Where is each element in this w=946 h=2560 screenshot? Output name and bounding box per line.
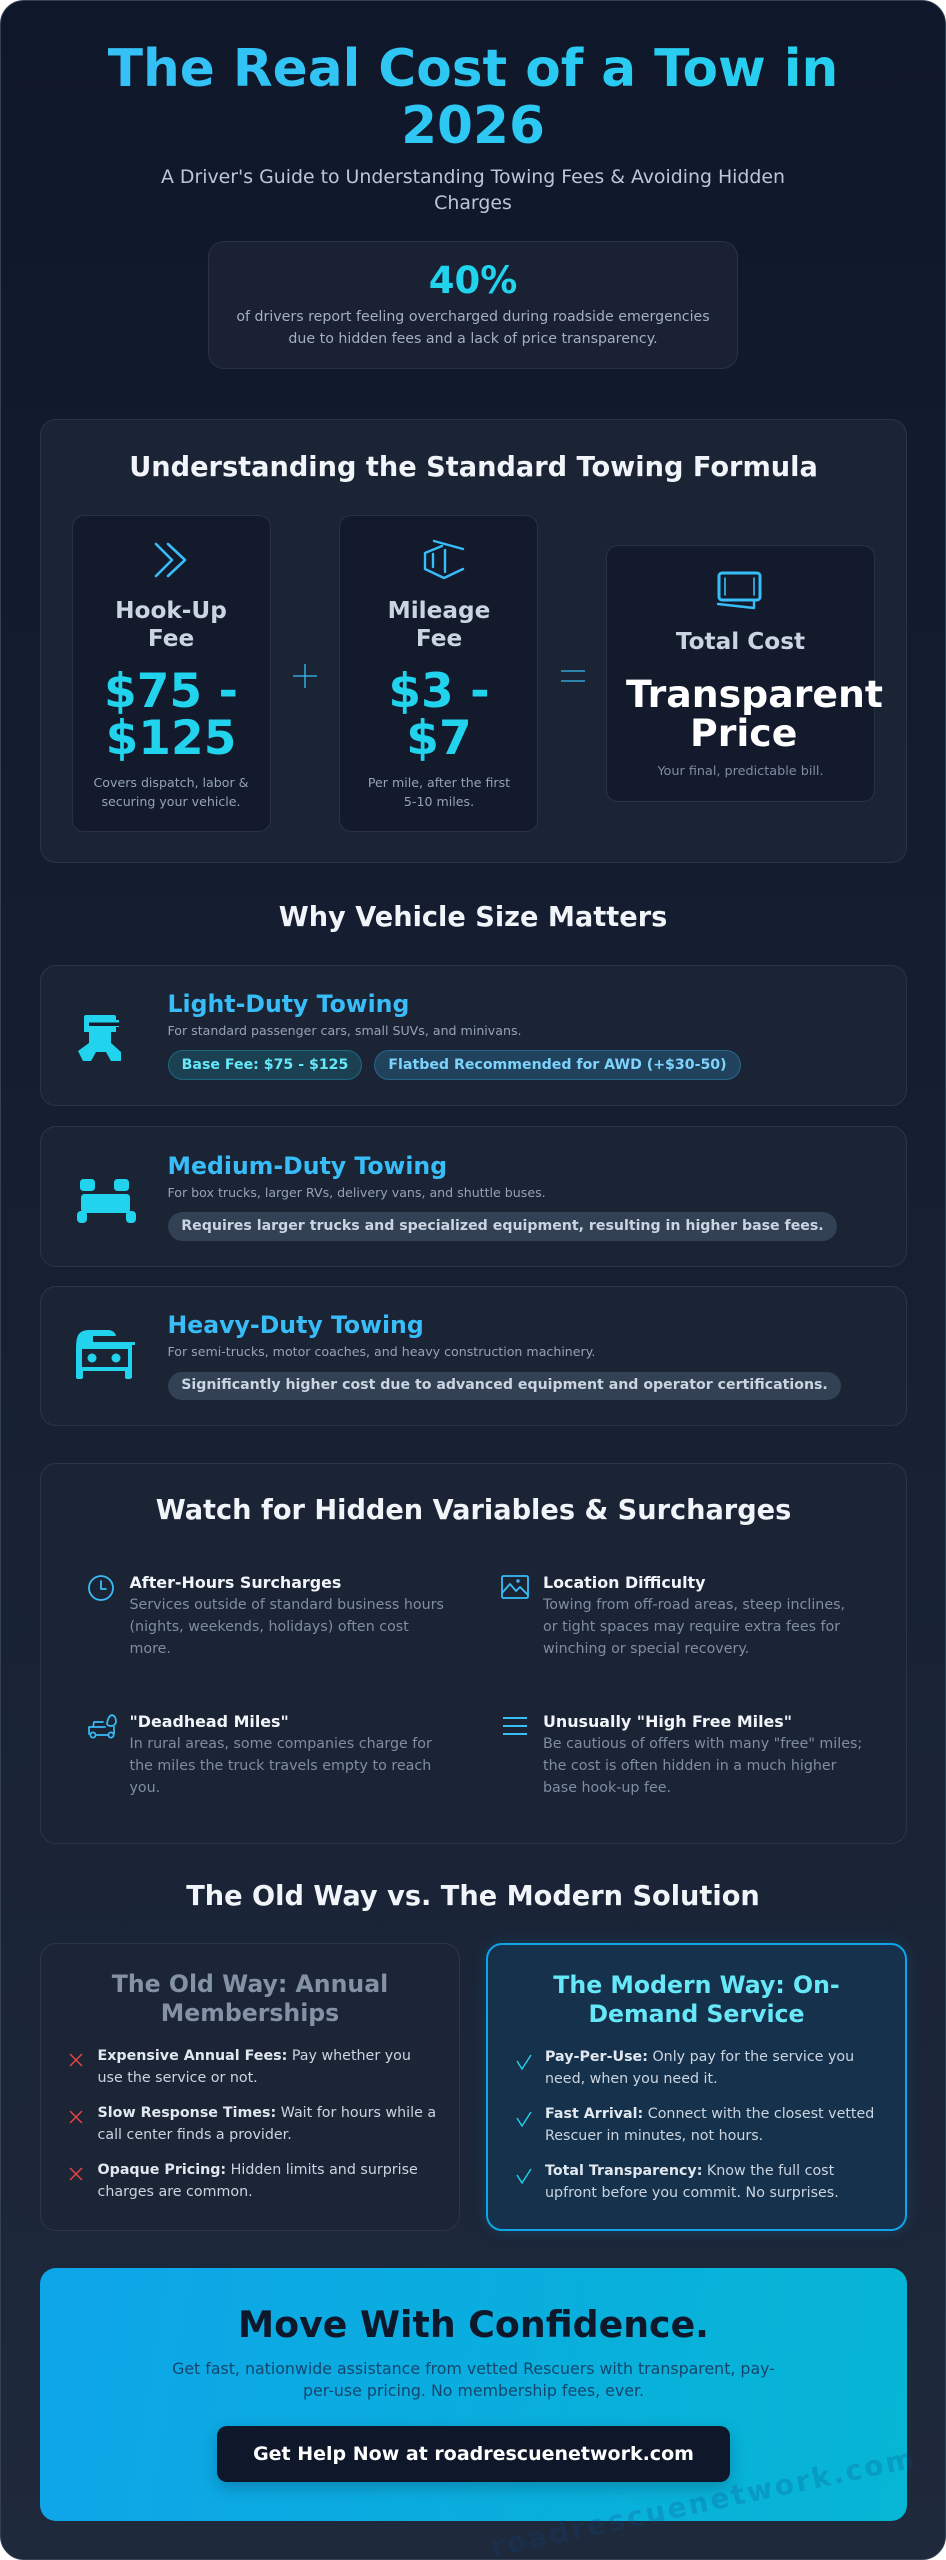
icon: medium truck xyxy=(77,1179,136,1223)
item: deadhead miles xyxy=(88,1712,432,1796)
value: transparent price xyxy=(626,672,883,754)
title: The Real Cost of a Tow in xyxy=(108,38,838,98)
note: hook-up xyxy=(94,775,248,809)
old way list xyxy=(70,2048,436,2200)
value: hook-up price: $75 - xyxy=(104,664,238,718)
item text: more. xyxy=(130,1641,171,1657)
text: charges are common. xyxy=(98,2184,253,2200)
note: mileage xyxy=(368,775,510,809)
item title: Location Difficulty xyxy=(543,1573,705,1592)
tag: base fee: Base Fee: $75 - $125 xyxy=(182,1057,348,1073)
vehicle description: light: For standard passenger cars, small SUVs, and minivans. xyxy=(168,1023,522,1038)
vehicle title: heavy: Heavy-Duty Towing xyxy=(168,1311,424,1339)
item text xyxy=(130,1597,444,1657)
panel: hidden variables xyxy=(40,1463,907,1844)
vehicle description: heavy: For semi-trucks, motor coaches, and heavy construction machinery. xyxy=(168,1344,595,1359)
card: heavy-duty xyxy=(40,1286,907,1426)
text: Opaque Pricing: Hidden limits and surprise xyxy=(98,2162,418,2178)
note: hook-up: Covers dispatch, labor & xyxy=(94,775,248,790)
subtitle: Charges xyxy=(434,192,512,214)
cta button: Get Help Now at roadrescuenetwork.com xyxy=(253,2443,694,2465)
value: transparent price: Transparent xyxy=(626,672,883,716)
icon: tow truck outline xyxy=(88,1714,117,1738)
text: Expensive Annual Fees: Pay whether you xyxy=(98,2048,411,2064)
text: Rescuer in minutes, not hours. xyxy=(545,2128,763,2144)
tag: heavy note: Significantly higher cost due to advanced equipment and operator certifications. xyxy=(181,1377,828,1393)
point: fees xyxy=(70,2048,411,2086)
value: hook-up price xyxy=(104,664,238,766)
tag: flatbed: Flatbed Recommended for AWD (+$30-50) xyxy=(388,1057,727,1073)
text xyxy=(98,2162,418,2200)
icon: cross xyxy=(70,2110,82,2124)
text: Slow Response Times: Wait for hours while a xyxy=(98,2105,436,2121)
vehicle title: medium: Medium-Duty Towing xyxy=(168,1152,447,1180)
item text: (nights, weekends, holidays) often cost xyxy=(130,1619,409,1635)
text xyxy=(545,2160,839,2204)
heading: hidden variables: Watch for Hidden Variables & Surcharges xyxy=(156,1494,791,1526)
stat description: due to hidden fees and a lack of price transparency. xyxy=(288,330,658,346)
tag: medium note xyxy=(168,1212,837,1241)
icon: lines xyxy=(503,1717,527,1735)
value: transparent price: Price xyxy=(690,710,797,754)
text: upfront before you commit. No surprises. xyxy=(545,2185,839,2201)
label: total cost: Total Cost xyxy=(676,628,805,655)
label: hook-up fee: Fee xyxy=(148,625,194,652)
label: mileage fee xyxy=(388,597,490,652)
card: medium-duty xyxy=(40,1126,907,1267)
item title: Unusually "High Free Miles" xyxy=(543,1712,792,1731)
item title: "Deadhead Miles" xyxy=(130,1712,289,1731)
item text: or tight spaces may require extra fees for xyxy=(543,1619,840,1635)
value: mileage price: $7 xyxy=(406,711,472,766)
item text: you. xyxy=(130,1780,160,1796)
card: hook-up fee xyxy=(72,515,271,832)
item text: the miles the truck travels empty to reach xyxy=(130,1758,431,1774)
tag: heavy note xyxy=(168,1372,841,1400)
old way heading: Memberships xyxy=(161,1998,339,2026)
text xyxy=(98,2105,436,2143)
icon: light tow truck xyxy=(78,1015,121,1061)
item text: base hook-up fee. xyxy=(543,1780,671,1796)
text: call center finds a provider. xyxy=(98,2127,292,2143)
label: hook-up fee xyxy=(115,597,227,652)
icon: heavy truck xyxy=(76,1330,135,1379)
text: Pay-Per-Use: Only pay for the service you xyxy=(545,2049,854,2065)
item text: Towing from off-road areas, steep inclines, xyxy=(543,1597,845,1613)
cta text xyxy=(40,2358,907,2402)
item title: After-Hours Surcharges xyxy=(130,1573,341,1592)
stat description: of drivers report feeling overcharged during roadside emergencies xyxy=(236,308,710,324)
item: after-hours xyxy=(88,1573,444,1657)
card: total cost xyxy=(606,545,875,802)
stat description xyxy=(236,308,710,346)
cta heading: Move With Confidence. xyxy=(238,2303,709,2346)
old way heading: The Old Way: Annual xyxy=(112,1970,388,1998)
title xyxy=(1,40,945,154)
item text: Services outside of standard business hours xyxy=(130,1597,444,1613)
item: high free miles xyxy=(503,1712,862,1796)
item text xyxy=(543,1736,862,1796)
panel: old way xyxy=(40,1943,460,2231)
watermark: roadrescuenetwork.com xyxy=(487,2441,920,2560)
cta text: Get fast, nationwide assistance from vetted Rescuers with transparent, pay- xyxy=(172,2358,775,2378)
heading: formula: Understanding the Standard Towing Formula xyxy=(129,452,818,483)
icon: check xyxy=(516,2168,532,2184)
card: mileage fee xyxy=(339,515,538,832)
text xyxy=(545,2103,874,2147)
item: location difficulty xyxy=(501,1573,845,1657)
icon: check xyxy=(516,2054,532,2070)
modern way heading: Demand Service xyxy=(588,2000,805,2028)
point: transparency xyxy=(488,2160,905,2210)
note: mileage: Per mile, after the first xyxy=(368,775,510,790)
icon: check xyxy=(516,2111,532,2127)
text: use the service or not. xyxy=(98,2070,258,2086)
panel: modern way xyxy=(486,1943,907,2231)
point: pricing xyxy=(70,2162,418,2200)
stat number: 40% xyxy=(429,259,517,302)
icon: cross xyxy=(70,2054,82,2066)
item text: winching or special recovery. xyxy=(543,1641,749,1657)
card: light-duty xyxy=(40,965,907,1106)
text: need, when you need it. xyxy=(545,2071,718,2087)
note: total: Your final, predictable bill. xyxy=(657,764,824,779)
text: Total Transparency: Know the full cost xyxy=(545,2163,834,2179)
text xyxy=(545,2046,854,2090)
point: response xyxy=(70,2105,436,2143)
value: hook-up price: $125 xyxy=(106,711,236,766)
vehicle title: light: Light-Duty Towing xyxy=(168,990,409,1018)
note: hook-up: securing your vehicle. xyxy=(101,794,241,809)
item text: In rural areas, some companies charge for xyxy=(130,1736,432,1752)
modern way heading xyxy=(488,1971,905,2028)
icon: picture xyxy=(501,1575,529,1599)
tag: base fee xyxy=(168,1050,362,1080)
icon: double chevron xyxy=(154,542,186,578)
label: mileage fee: Fee xyxy=(416,625,462,652)
heading: old vs modern: The Old Way vs. The Modern Solution xyxy=(186,1880,760,1912)
text xyxy=(98,2048,411,2086)
item text: the cost is often hidden in a much higher xyxy=(543,1758,837,1774)
point: fast arrival xyxy=(488,2103,905,2153)
item text xyxy=(130,1736,432,1796)
tag: flatbed xyxy=(374,1050,741,1080)
value: mileage price: $3 - xyxy=(388,664,490,718)
stat callout xyxy=(208,241,738,369)
text: Fast Arrival: Connect with the closest vetted xyxy=(545,2106,874,2122)
operator: equals xyxy=(561,670,585,682)
vehicle description: medium: For box trucks, larger RVs, delivery vans, and shuttle buses. xyxy=(168,1185,546,1200)
subtitle xyxy=(161,166,785,214)
icon: clock xyxy=(88,1575,114,1601)
old way heading xyxy=(112,1970,388,2026)
label: mileage fee: Mileage xyxy=(388,597,490,624)
panel: call to action xyxy=(40,2268,907,2521)
point: pay-per-use xyxy=(488,2046,905,2096)
tag: medium note: Requires larger trucks and specialized equipment, resulting in higher base fees. xyxy=(181,1218,824,1234)
icon: cross xyxy=(70,2168,82,2180)
icon: bill xyxy=(716,572,762,610)
modern way list xyxy=(488,2046,905,2206)
modern way heading: The Modern Way: On- xyxy=(553,1971,840,1999)
cta button xyxy=(217,2426,730,2482)
item text: Be cautious of offers with many "free" miles; xyxy=(543,1736,862,1752)
note: mileage: 5-10 miles. xyxy=(404,794,474,809)
operator: plus xyxy=(293,664,317,688)
value: mileage price xyxy=(388,664,490,766)
icon: mileage xyxy=(424,540,464,580)
cta text: per-use pricing. No membership fees, ever. xyxy=(303,2380,644,2400)
heading: vehicle size: Why Vehicle Size Matters xyxy=(279,902,667,932)
subtitle: A Driver's Guide to Understanding Towing Fees & Avoiding Hidden xyxy=(161,166,785,188)
item text xyxy=(542,1597,845,1657)
label: hook-up fee: Hook-Up xyxy=(115,597,227,624)
panel: towing formula xyxy=(40,419,907,863)
title: 2026 xyxy=(401,96,545,156)
